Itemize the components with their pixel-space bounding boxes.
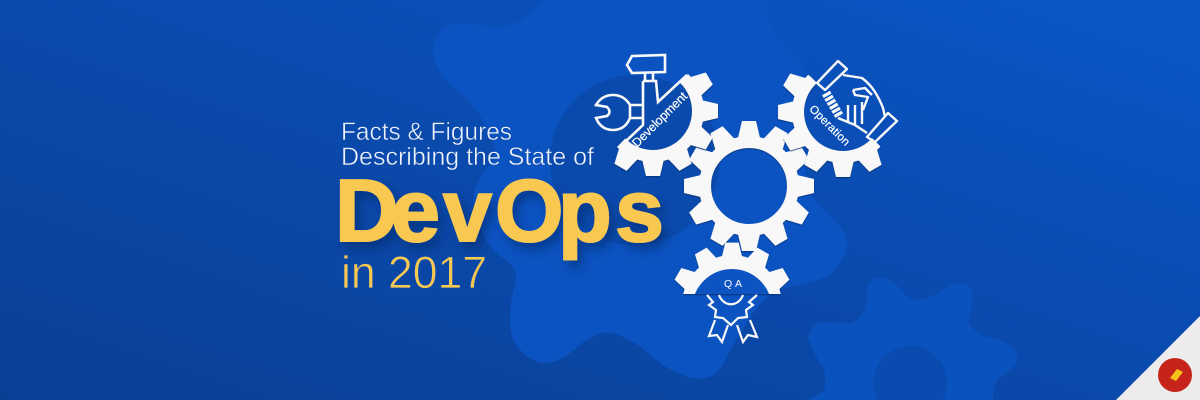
icon: operation gear — [778, 74, 882, 178]
subtitle: Describing the State of: Describing the State of — [341, 143, 594, 171]
title: Facts and Figures: Facts & Figures — [341, 118, 512, 146]
label: Development: Development — [629, 89, 690, 150]
icon: handshake — [817, 61, 897, 142]
icon: development gear — [614, 72, 718, 178]
icon: QA gear — [674, 242, 790, 296]
label: Operation: Operation — [806, 103, 852, 149]
corner badge — [1116, 316, 1200, 400]
background large gear shape — [433, 0, 847, 378]
title: DevOps: DevOps — [335, 161, 664, 260]
label: QA: Q A — [724, 278, 742, 290]
subtitle: in 2017: in 2017 — [341, 247, 487, 298]
background small gear shape — [808, 278, 1018, 400]
icon: award rosette — [707, 295, 757, 342]
icon: hammer and wrench — [596, 55, 687, 142]
icon: center gear — [684, 121, 814, 251]
